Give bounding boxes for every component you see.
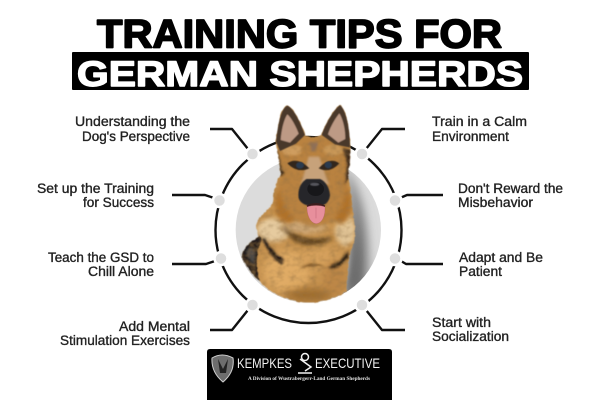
mouth (307, 203, 325, 209)
dark head sides (343, 148, 351, 185)
tip: Train in a Calm Environment: Environment (432, 129, 509, 144)
tip: Don't Reward the Misbehavior (458, 181, 563, 210)
tip: Adapt and Be Patient: Adapt and Be (459, 250, 543, 265)
tip: Teach the GSD to Chill Alone: Teach the GSD to (48, 250, 154, 265)
logo wordmark: EXECUTIVE (315, 355, 380, 371)
tip: Train in a Calm Environment (432, 114, 527, 144)
grey backdrop circle with shadow (236, 164, 381, 302)
tongue (307, 205, 325, 224)
tip: Add Mental Stimulation Exercises: Stimulation Exercises (60, 333, 190, 348)
heading line: Training Tips For: TRAINING TIPS FOR (97, 12, 502, 56)
dark neck streaks (262, 238, 284, 264)
dog (237, 102, 360, 308)
tip: Understanding the Dog's Perspective: Dog's Perspective (82, 129, 190, 144)
tip: Add Mental Stimulation Exercises: Add Mental (119, 319, 190, 334)
tip: Teach the GSD to Chill Alone: Chill Alone (88, 264, 154, 279)
tip: Don't Reward the Misbehavior: Misbehavior (458, 195, 534, 210)
tip: Train in a Calm Environment: Train in a Calm (432, 114, 527, 129)
dark back patch (240, 236, 262, 283)
dog portrait on grey circle (233, 102, 383, 308)
connector lines (172, 129, 443, 330)
tip: Adapt and Be Patient: Patient (459, 264, 502, 279)
central ring (216, 137, 402, 323)
tip: Teach the GSD to Chill Alone (48, 250, 154, 279)
logo: Kempkes Executive (207, 349, 392, 400)
logo wordmark: KEMPKES (237, 355, 292, 371)
tip: Add Mental Stimulation Exercises (60, 319, 190, 348)
tip: Understanding the Dog's Perspective: Understanding the (75, 114, 190, 129)
heading banner: German Shepherds: GERMAN SHEPHERDS (77, 54, 523, 94)
tip: Start with Socialization: Start with (432, 315, 491, 330)
orange chest (263, 250, 310, 293)
tip: Set up the Training for Success (37, 181, 154, 210)
tip: Start with Socialization (432, 315, 509, 344)
icon: K9 monogram (298, 354, 312, 373)
icon: shield crest (212, 355, 233, 382)
ears (276, 105, 350, 151)
ruff sides (273, 186, 296, 226)
tip: Don't Reward the Misbehavior: Don't Reward the (458, 181, 563, 196)
dark fold under ruff (282, 223, 333, 245)
tip: Set up the Training for Success: Set up the Training (37, 181, 154, 196)
eyes (287, 161, 339, 170)
tip: Understanding the Dog's Perspective (75, 114, 190, 144)
tip: Start with Socialization: Socialization (432, 329, 509, 344)
tip: Adapt and Be Patient (459, 250, 543, 279)
muzzle bridge (301, 157, 329, 184)
title (72, 12, 529, 94)
head fill (278, 136, 349, 226)
nose (307, 182, 324, 196)
connector nodes (213, 148, 402, 312)
pale neck ruff (257, 218, 290, 242)
logo tagline: A Division of Wustrabergerr-Land German Shepherds (248, 376, 370, 382)
muzzle (298, 179, 330, 206)
tip: Set up the Training for Success: for Success (83, 195, 154, 210)
